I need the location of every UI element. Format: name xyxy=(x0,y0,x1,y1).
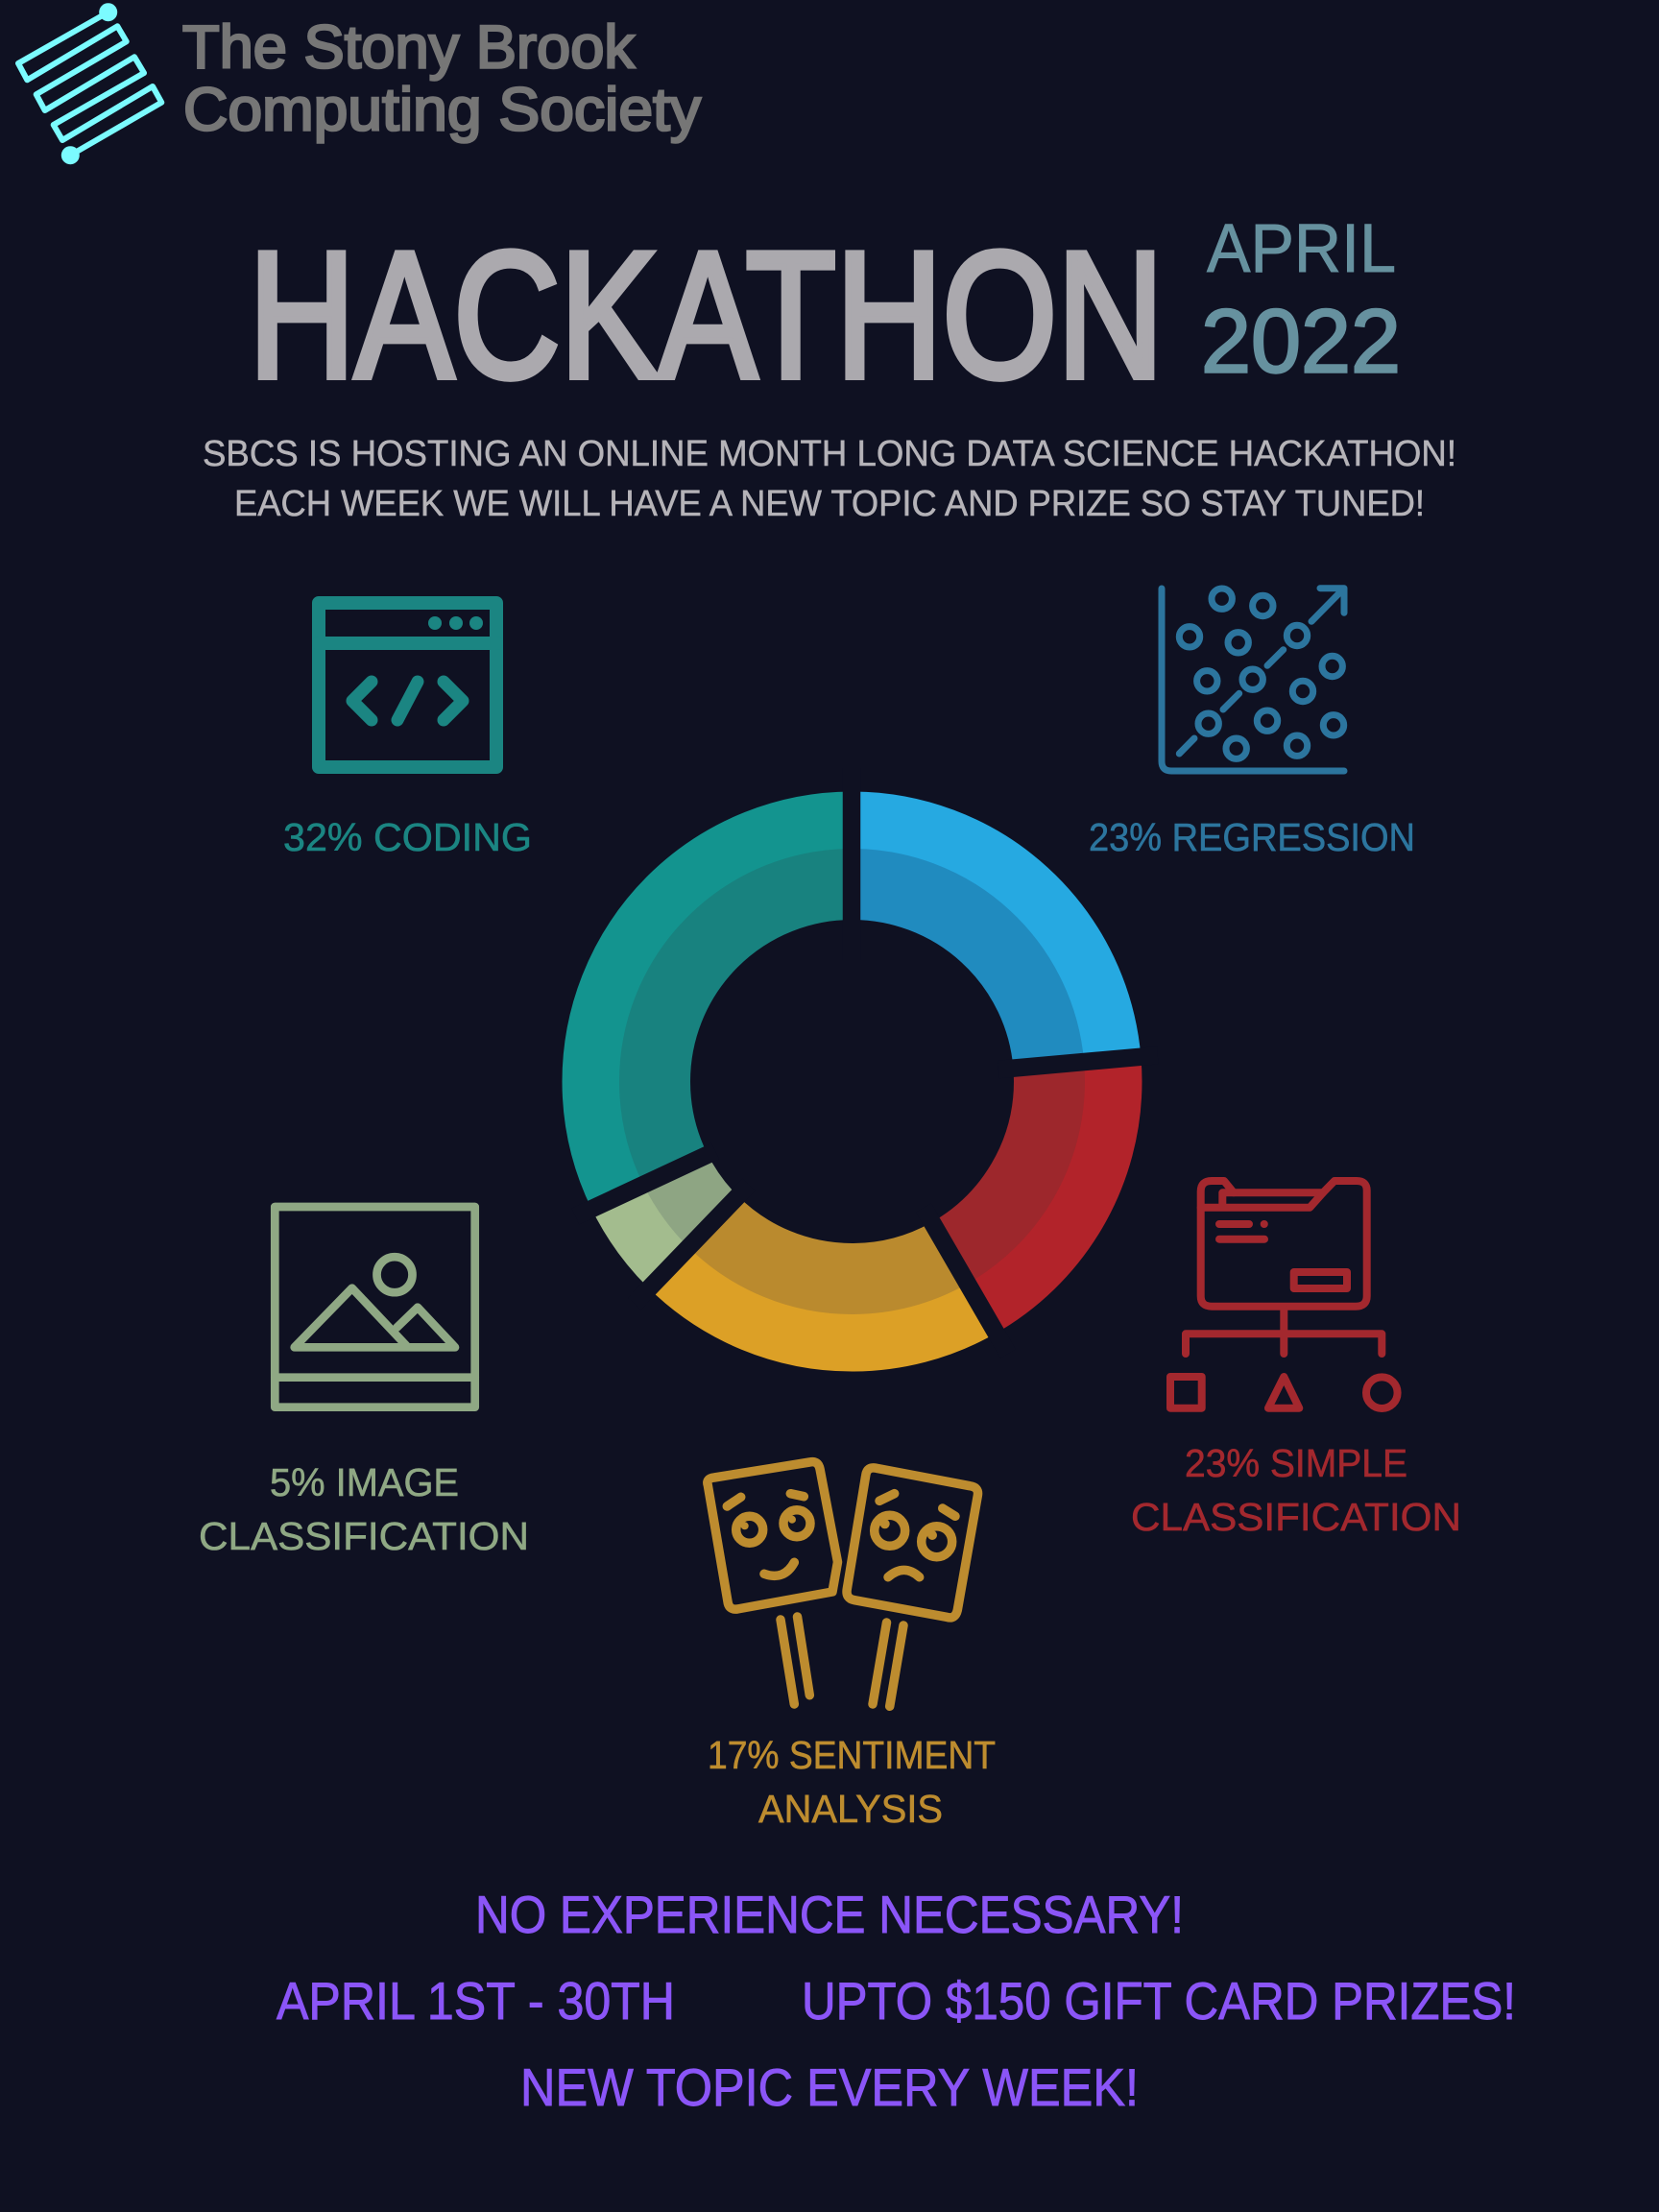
label: simple classification: 23% SIMPLE xyxy=(1185,1441,1407,1485)
label: sentiment analysis xyxy=(708,1733,996,1831)
icon: serpentine logo mark xyxy=(18,3,161,164)
icon: regression scatter plot xyxy=(1162,589,1344,771)
date: april 2022: 2022 xyxy=(1201,290,1401,392)
title: hackathon: HACKATHON xyxy=(249,215,1164,415)
icon: happy and sad face signs xyxy=(708,1462,978,1706)
intro text: EACH WEEK WE WILL HAVE A NEW TOPIC AND PRIZE SO STAY TUNED! xyxy=(234,484,1425,524)
intro text: SBCS IS HOSTING AN ONLINE MONTH LONG DATA SCIENCE HACKATHON! xyxy=(203,434,1456,474)
segment: image classification xyxy=(591,820,1114,1342)
society name xyxy=(182,13,702,144)
label: simple classification: CLASSIFICATION xyxy=(1131,1495,1461,1539)
society name: The Stony Brook xyxy=(182,13,635,81)
header: society logo and name xyxy=(18,3,702,164)
label: coding: 32% CODING xyxy=(283,815,532,859)
date: april 2022 xyxy=(1201,211,1401,392)
donut chart xyxy=(575,768,1158,1354)
label: image classification: CLASSIFICATION xyxy=(199,1514,529,1558)
footer: event highlights: UPTO $150 GIFT CARD PRIZES! xyxy=(802,1971,1516,2031)
segment: regression xyxy=(591,820,1114,1342)
label: sentiment analysis: 17% SENTIMENT xyxy=(708,1733,996,1777)
label: simple classification xyxy=(1131,1441,1461,1539)
date: april 2022: APRIL xyxy=(1207,211,1396,287)
society name: Computing Society xyxy=(183,77,702,144)
segment: simple classification xyxy=(591,820,1114,1342)
footer: event highlights: APRIL 1ST - 30TH xyxy=(276,1971,675,2031)
icon: coding window xyxy=(319,603,496,767)
happy sign xyxy=(708,1462,837,1704)
footer: event highlights: NEW TOPIC EVERY WEEK! xyxy=(520,2057,1139,2117)
sad sign xyxy=(847,1468,978,1706)
label: image classification: 5% IMAGE xyxy=(270,1460,459,1504)
label: regression: 23% REGRESSION xyxy=(1089,815,1415,859)
label: sentiment analysis: ANALYSIS xyxy=(758,1787,943,1831)
intro text xyxy=(203,434,1456,524)
icon: folder with classification tree xyxy=(1170,1181,1398,1408)
segment: coding xyxy=(591,820,1114,1342)
footer: event highlights: NO EXPERIENCE NECESSARY! xyxy=(475,1885,1184,1944)
icon: image frame with mountains xyxy=(275,1207,475,1407)
footer: event highlights xyxy=(276,1885,1516,2117)
segment: sentiment analysis xyxy=(591,820,1114,1342)
label: image classification xyxy=(199,1460,529,1558)
